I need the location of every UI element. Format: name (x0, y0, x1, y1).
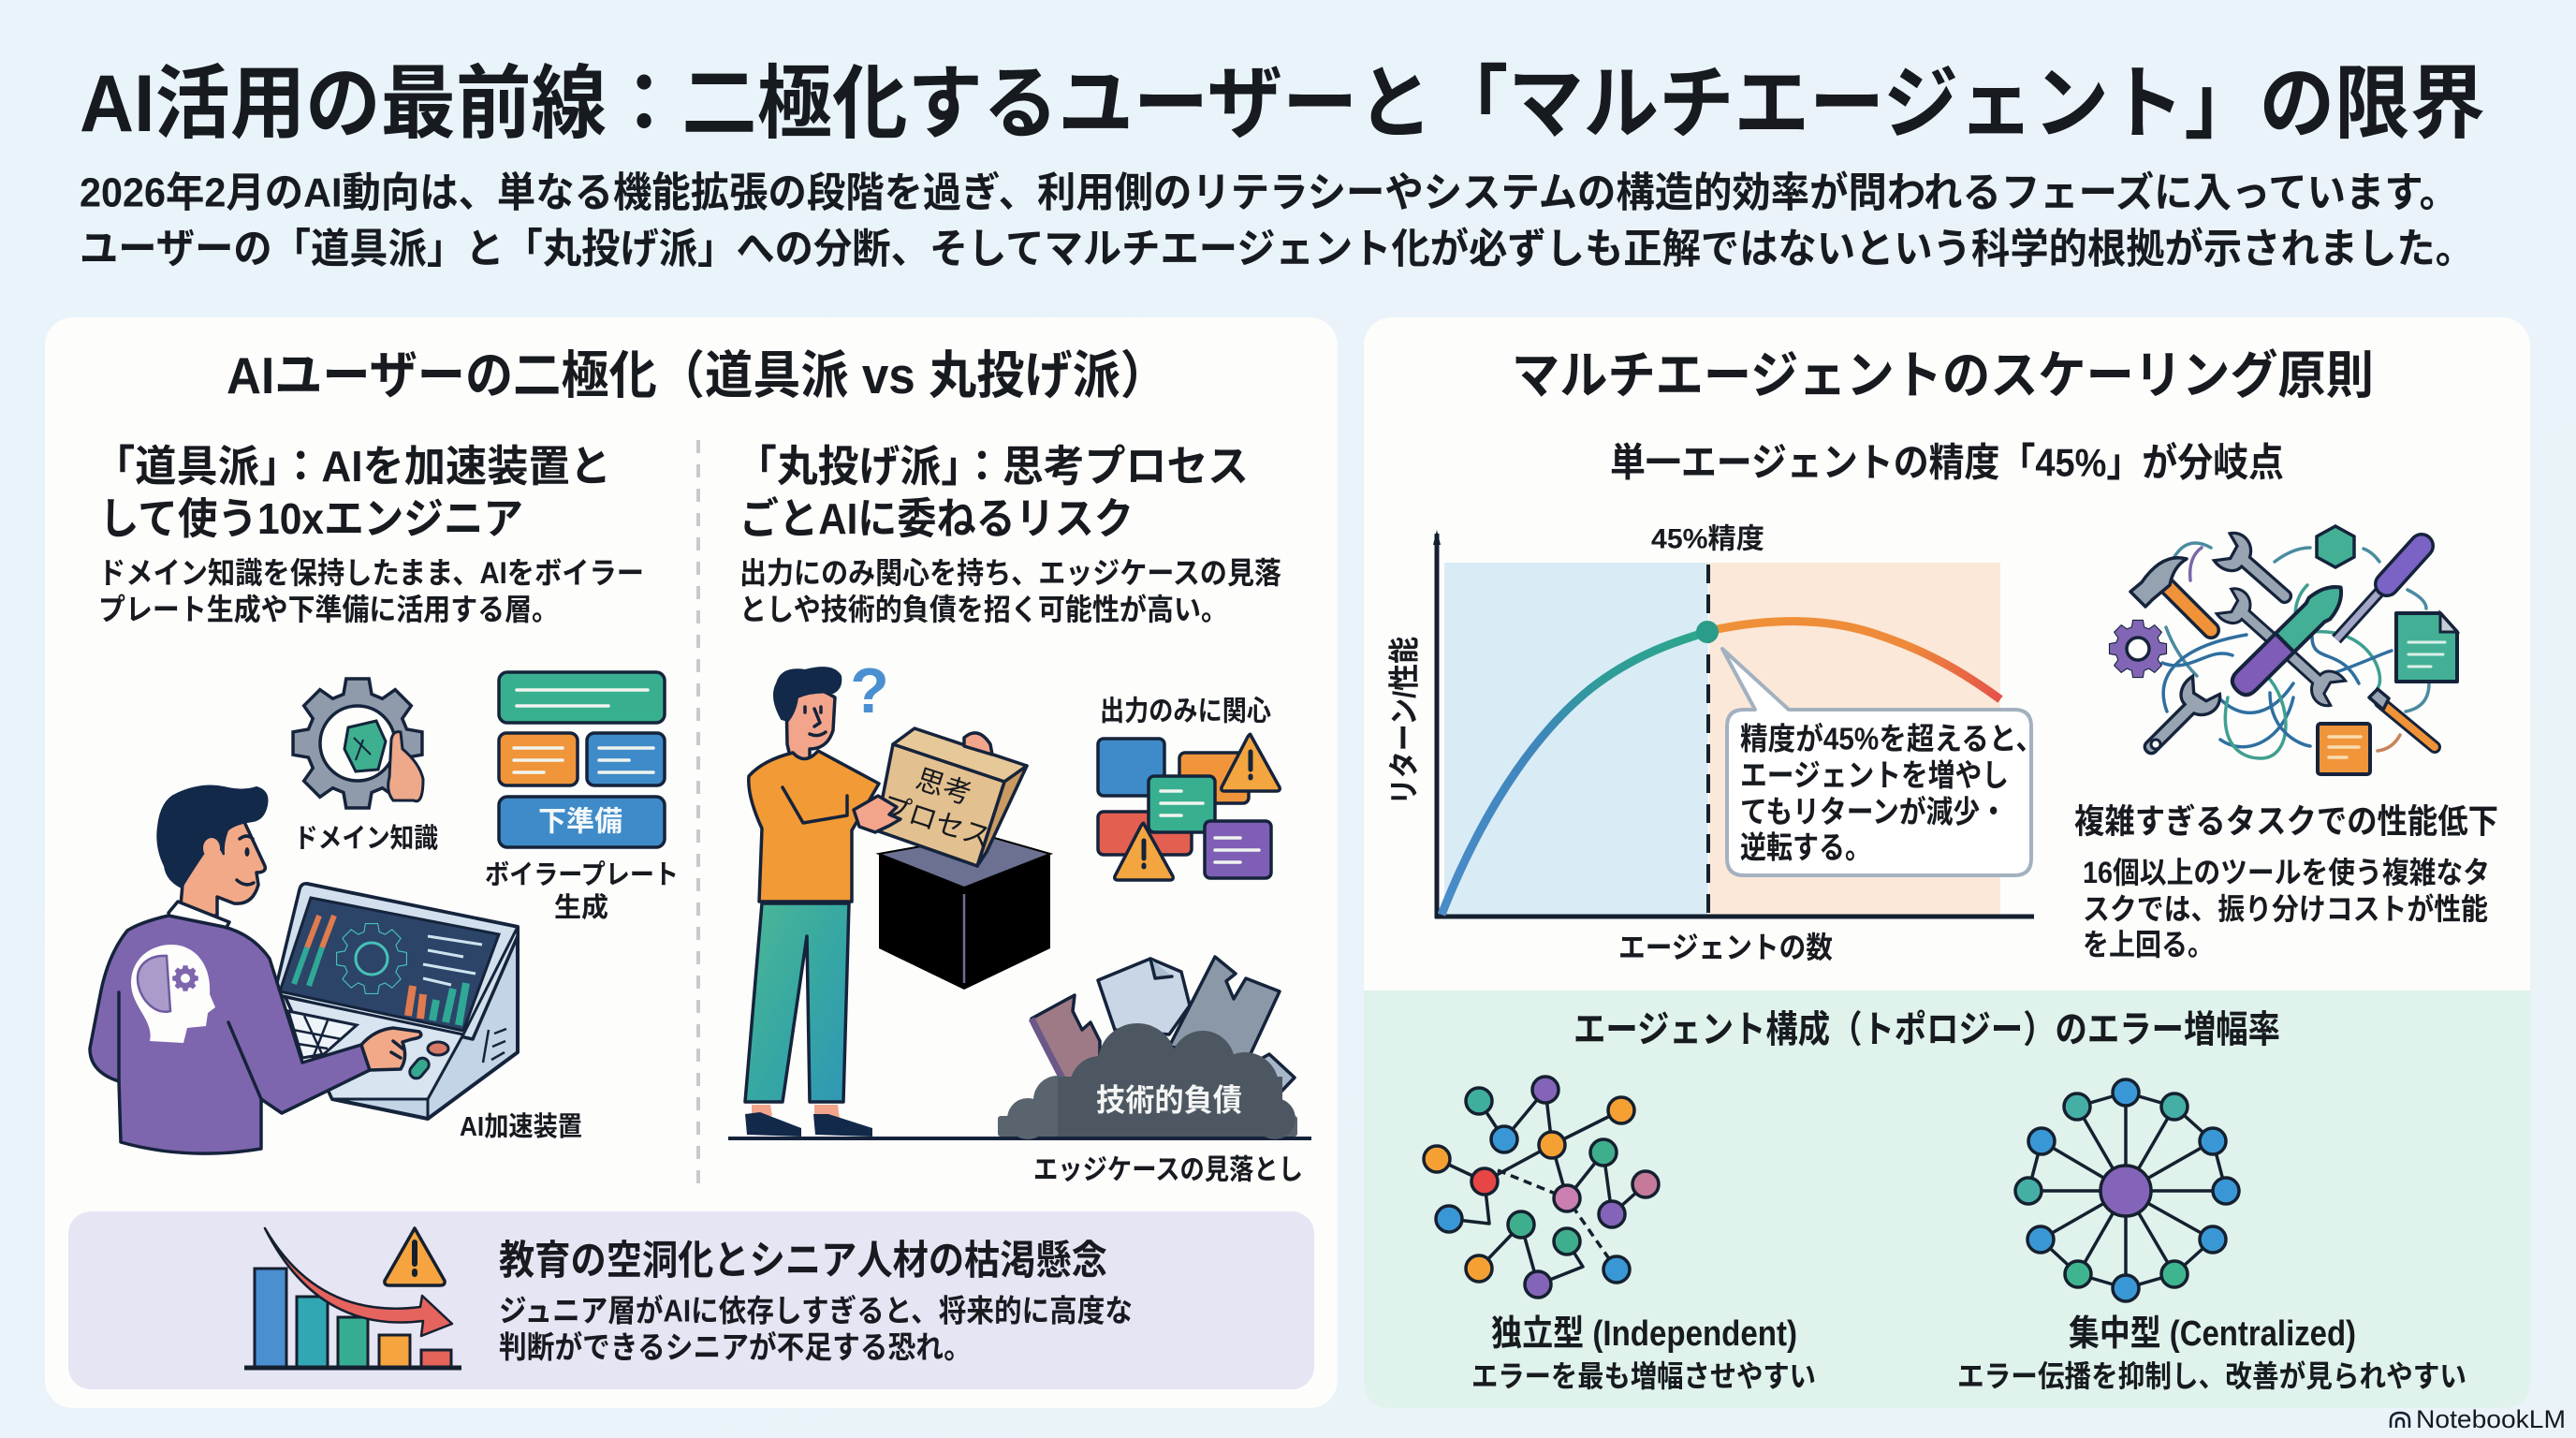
screwdriver (2336, 546, 2422, 639)
icon: domain knowledge gear (293, 679, 423, 808)
label: only interested in output: 出力のみに関心 (1100, 697, 1271, 726)
panel: multi-agent scaling (1364, 317, 2530, 1408)
intro text (80, 170, 2474, 271)
person figure (745, 668, 879, 1137)
callout bubble: 精度が45%を超えると、 (1740, 721, 2043, 756)
label: independent (1471, 1314, 1816, 1393)
callout heading: 教育の空洞化とシニア人材の枯渇懸念 (499, 1239, 1107, 1284)
pencil (2226, 577, 2351, 701)
label: independent: エラーを最も増幅させやすい (1471, 1359, 1816, 1393)
diagram: centralized topology (2015, 1079, 2239, 1301)
axis label: return: リターン/性能 (1387, 637, 1421, 805)
callout body: 判断ができるシニアが不足する恐れ。 (499, 1329, 972, 1365)
label: preparation: 下準備 (538, 807, 622, 837)
column: delegators text: 「丸投げ派」：思考プロセス (736, 442, 1249, 491)
column: tool users text: プレート生成や下準備に活用する層。 (98, 593, 559, 626)
column divider (696, 440, 700, 1186)
column: delegators text: ごとAIに委ねるリスク (739, 494, 1134, 543)
illustration: tangled tools (2109, 526, 2457, 774)
callout bubble: てもリターンが減少・ (1740, 794, 2007, 829)
callout body: ジュニア層がAIに依存しすぎると、将来的に高度な (499, 1294, 1133, 1328)
ground line (728, 1137, 1311, 1140)
thought process box: 思考 (912, 764, 975, 811)
label: independent: 独立型 (Independent) (1491, 1314, 1797, 1354)
axis label: agents: エージェントの数 (1618, 931, 1833, 964)
label: centralized (1957, 1314, 2466, 1393)
question mark: ? (850, 655, 889, 726)
callout bubble (1722, 649, 2043, 875)
callout bubble: エージェントを増やし (1740, 758, 2009, 792)
engineer figure (90, 786, 421, 1153)
text: degradation on complex tasks (2074, 801, 2498, 961)
text: degradation on complex tasks: スクでは、振り分けコストが性能 (2083, 892, 2488, 926)
icon: boilerplate blocks (499, 672, 665, 847)
black box (879, 835, 1050, 990)
thought process box: プロセス (878, 790, 994, 854)
label: boilerplate generation (485, 859, 679, 923)
column: tool users text: して使う10xエンジニア (99, 494, 523, 543)
column: delegators text: 出力にのみ関心を持ち、エッジケースの見落 (739, 556, 1281, 590)
hammer (2130, 558, 2211, 630)
label: 45% accuracy: 45%精度 (1651, 524, 1764, 554)
panel heading: AIユーザーの二極化（道具派 vs 丸投げ派） (227, 346, 1168, 404)
panel: AI user polarization (45, 317, 1338, 1408)
label: boilerplate generation: ボイラープレート (485, 859, 679, 890)
icon: declining bars with warning (244, 1228, 461, 1368)
text: degradation on complex tasks: 16個以上のツールを使う複雑なタ (2083, 856, 2490, 889)
label: boilerplate generation: 生成 (554, 892, 608, 923)
column: tool users text (94, 442, 644, 626)
intro text: 2026年2月のAI動向は、単なる機能拡張の段階を過ぎ、利用側のリテラシーやシステムの構造的効率が問われるフェーズに入っています。 (80, 170, 2458, 215)
chart heading: 単一エージェントの精度「45%」が分岐点 (1610, 440, 2284, 485)
column: tool users text: ドメイン知識を保持したまま、AIをボイラー (98, 556, 644, 590)
topology heading: エージェント構成（トポロジー）のエラー増幅率 (1573, 1009, 2280, 1050)
label: domain knowledge: ドメイン知識 (294, 823, 438, 854)
column: delegators text: としや技術的負債を招く可能性が高い。 (739, 593, 1228, 626)
callout bubble: 逆転する。 (1740, 829, 1871, 865)
illustration: delegating person (728, 655, 1311, 1138)
brush (2369, 689, 2435, 747)
accelerator machine (274, 884, 518, 1119)
callout: senior talent shortage (68, 1211, 1314, 1389)
document (2396, 613, 2457, 682)
thought process box (854, 728, 1027, 866)
label: overlooked edge cases: エッジケースの見落とし (1033, 1155, 1303, 1185)
intro text: ユーザーの「道具派」と「丸投げ派」への分断、そしてマルチエージェント化が必ずしも正解ではないという科学的根拠が示されました。 (80, 227, 2474, 271)
illustration: technical debt pile (998, 957, 1297, 1139)
callout body (499, 1294, 1133, 1365)
chart: returns vs number of agents (1387, 524, 2043, 964)
NotebookLM logo: NotebookLM (2416, 1405, 2566, 1433)
label: technical debt: 技術的負債 (1096, 1082, 1242, 1118)
label: centralized: 集中型 (Centralized) (2069, 1314, 2356, 1354)
diagram: independent topology (1424, 1077, 1659, 1298)
label: AI accelerator: AI加速装置 (460, 1111, 582, 1142)
panel heading: マルチエージェントのスケーリング原則 (1512, 346, 2374, 404)
icon: output cards with warnings (1098, 734, 1280, 880)
column: delegators text (736, 442, 1281, 626)
text: degradation on complex tasks: を上回る。 (2083, 928, 2214, 961)
text: degradation on complex tasks: 複雑すぎるタスクでの性能低下 (2074, 801, 2498, 841)
column: tool users text: 「道具派」：AIを加速装置と (94, 442, 611, 491)
title: AI活用の最前線：二極化するユーザーと「マルチエージェント」の限界 (80, 59, 2485, 149)
illustration: engineer at AI accelerator (90, 786, 518, 1153)
note (2318, 724, 2370, 774)
label: centralized: エラー伝播を抑制し、改善が見られやすい (1957, 1359, 2466, 1393)
